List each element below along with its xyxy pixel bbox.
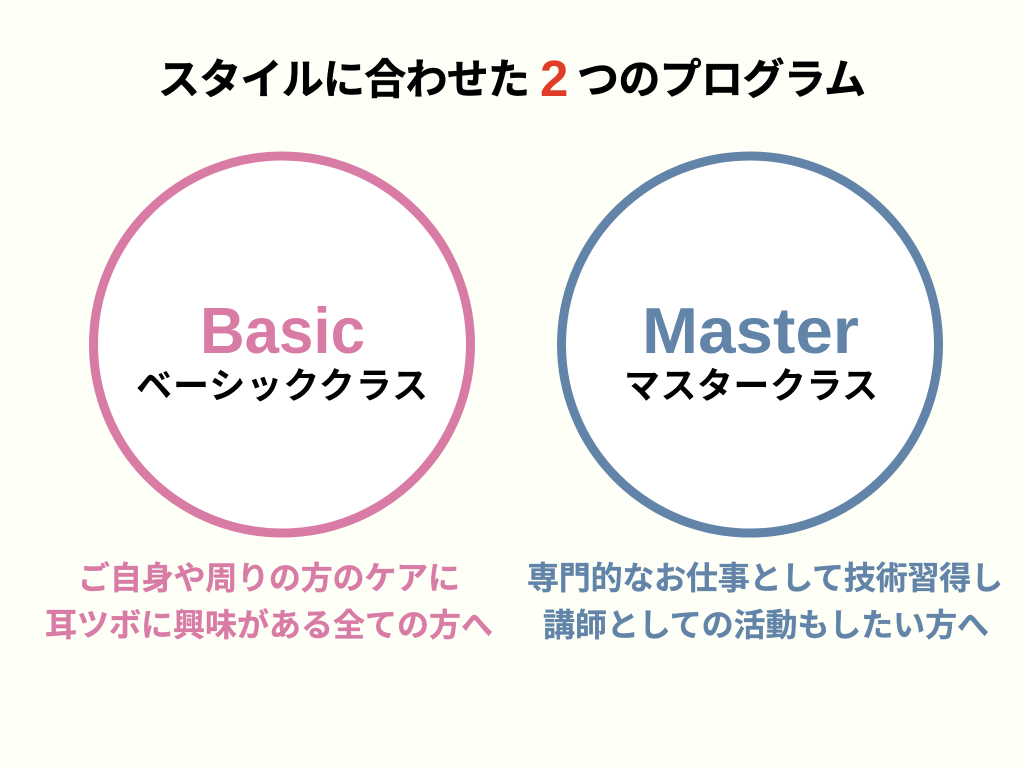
panel: basic class bbox=[94, 156, 470, 533]
panel: master class bbox=[562, 156, 938, 533]
subheading: master class: マスタークラス bbox=[624, 365, 878, 406]
text block: master description: 講師としての活動もしたい方へ bbox=[543, 607, 989, 643]
text block: basic description: 耳ツボに興味がある全ての方へ bbox=[45, 607, 493, 643]
title: 2 bbox=[540, 50, 568, 107]
heading: Basic: Basic bbox=[200, 294, 365, 367]
title: つのプログラム bbox=[577, 56, 866, 103]
text block: basic description: ご自身や周りの方のケアに bbox=[78, 560, 460, 596]
title bbox=[158, 50, 866, 107]
text block: master description: 専門的なお仕事として技術習得し bbox=[527, 560, 1003, 596]
heading: Master: Master bbox=[642, 294, 859, 367]
circle: basic bbox=[94, 156, 470, 533]
subheading: basic class: ベーシッククラス bbox=[136, 365, 428, 406]
circle: master bbox=[562, 156, 938, 533]
text block: master description bbox=[527, 560, 1003, 643]
text block: basic description bbox=[45, 560, 493, 643]
title: スタイルに合わせた bbox=[158, 56, 530, 103]
